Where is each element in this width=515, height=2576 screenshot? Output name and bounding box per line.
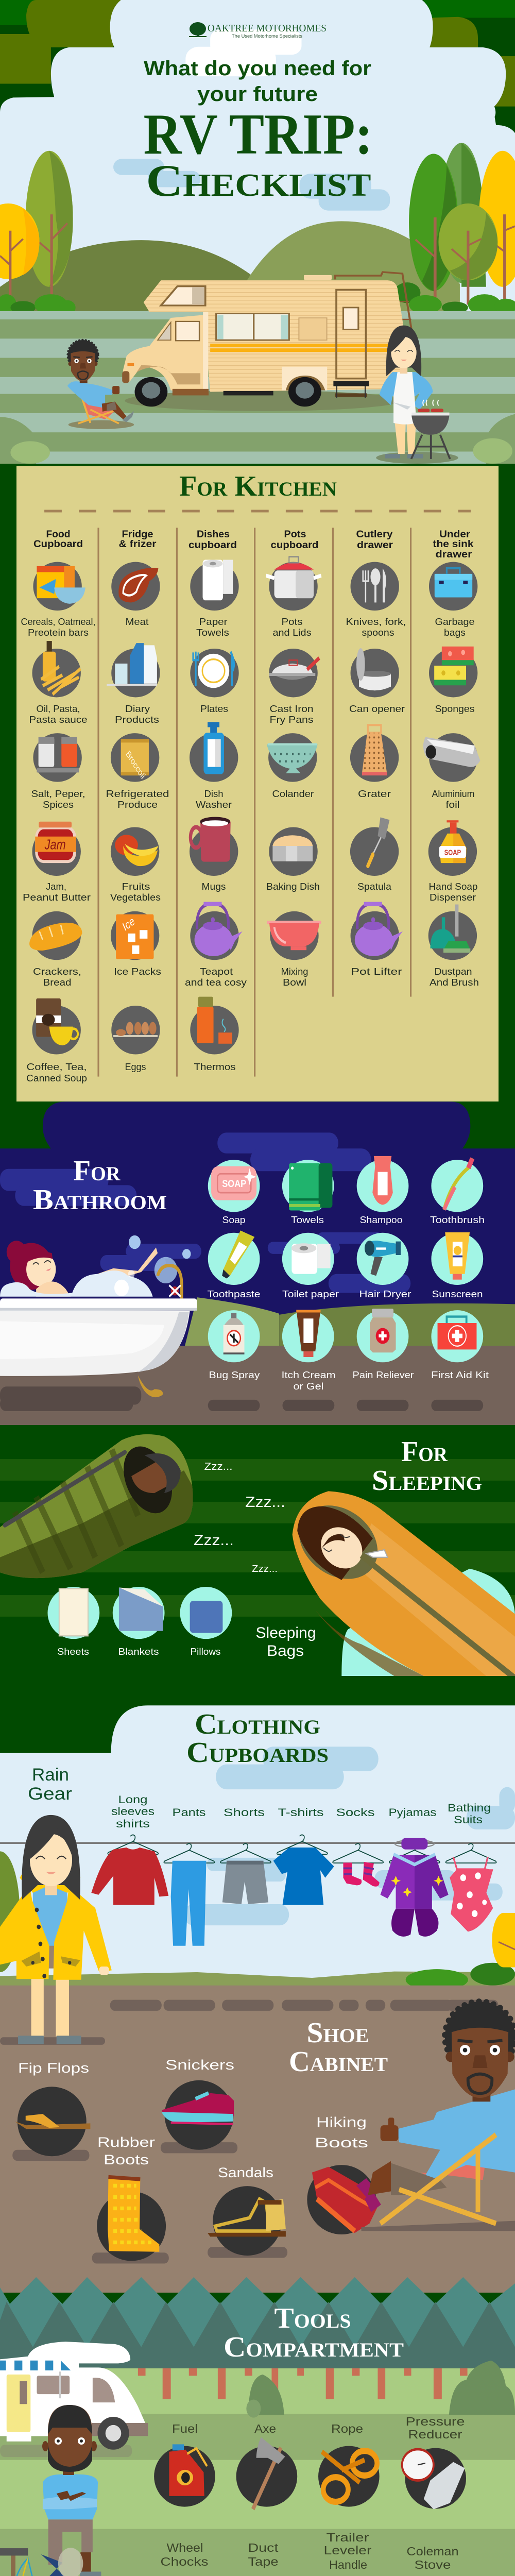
clothing labels: Bathing: [448, 1802, 491, 1814]
hills and bushes: [0, 1851, 515, 1990]
ground: [0, 1986, 515, 2293]
woman in sleeping bag: [288, 1491, 515, 1678]
kitchen item labels: Refrigerated: [106, 789, 169, 799]
column headers: Food: [46, 529, 70, 540]
tool labels: Tape: [248, 2555, 278, 2568]
kitchen item labels: Jam,: [46, 882, 66, 892]
clothing labels: Long: [118, 1794, 147, 1806]
kitchen item labels: Dispenser: [430, 892, 476, 903]
kitchen item labels: Vegetables: [110, 892, 161, 903]
woman with barbecue torso: [376, 372, 458, 464]
column headers: drawer: [357, 540, 393, 551]
icon: plates: [190, 649, 239, 697]
heading: Tools Compartment: Tools: [274, 2302, 351, 2334]
faucet: [158, 1265, 182, 1298]
icon: coffee: [32, 998, 81, 1055]
icon: pillows: [180, 1587, 232, 1639]
panel: clothing: [0, 1705, 515, 2293]
kitchen item labels: spoons: [362, 628, 394, 638]
head: woman rain gear: [22, 1815, 80, 1900]
kitchen item labels: Diary: [125, 704, 150, 714]
column headers: [33, 529, 474, 560]
shoe labels: Hiking: [316, 2114, 367, 2130]
kitchen item labels: Plates: [200, 704, 228, 714]
panel: bathroom: [0, 1101, 515, 1425]
sleeping labels: Pillows: [191, 1647, 220, 1657]
sleeping labels: Sheets: [57, 1647, 89, 1657]
clothing labels: Rain: [32, 1765, 69, 1785]
icon: bug spray: [208, 1310, 260, 1362]
kitchen item labels: Aluminium: [432, 789, 475, 799]
icon: pot lifter: [351, 904, 403, 960]
icon: flip flops: [12, 2087, 90, 2161]
icon: pots and lids: [266, 557, 321, 611]
tool labels: Wheel: [167, 2541, 203, 2554]
icon: jam: [32, 822, 81, 876]
heading: Clothing Cupboards: Clothing: [195, 1708, 320, 1740]
item: pants: [164, 1843, 214, 1946]
wheels: [134, 377, 321, 406]
icon: toothpaste: [208, 1230, 260, 1285]
item: long sleeves shirt: [91, 1835, 168, 1905]
tool labels: Handle: [329, 2558, 367, 2571]
grass: [0, 2368, 515, 2576]
icon: can opener: [351, 648, 399, 697]
kitchen item labels: Baking Dish: [266, 882, 320, 892]
column headers: Pots: [284, 529, 306, 540]
steps: [333, 381, 369, 398]
sleeping labels: Blankets: [118, 1647, 159, 1657]
kitchen item labels: Oil, Pasta,: [36, 704, 80, 714]
icon: soap: SOAP: [222, 1178, 246, 1189]
kitchen item labels: Products: [115, 715, 159, 725]
bathroom labels: Towels: [291, 1215, 324, 1225]
kitchen item labels: Can opener: [349, 704, 405, 714]
icon: blankets: [113, 1587, 165, 1639]
kitchen item labels: Paper: [199, 617, 228, 627]
head: man: [68, 340, 98, 383]
heading: Shoe Cabinet: [289, 2017, 388, 2078]
kitchen item labels: Mugs: [202, 882, 226, 892]
icon: paper towels: [190, 560, 239, 611]
icon: itch cream: [282, 1310, 334, 1362]
logo: OAKTREE MOTORHOMES: [208, 23, 327, 34]
icon: soap: [208, 1160, 260, 1212]
icon: toilet paper: [282, 1233, 334, 1285]
man chair: [67, 381, 134, 429]
icon: jam: Jam: [44, 837, 66, 853]
kitchen item labels: And Brush: [430, 977, 479, 988]
icon: salt and pepper: [33, 733, 82, 782]
kitchen item labels: Grater: [358, 789, 391, 799]
panel: shoe cabinet text: [18, 2017, 388, 2180]
kitchen item labels: [21, 617, 479, 1083]
kitchen dividers: [44, 511, 471, 1077]
item: bathing suit: [446, 1843, 496, 1931]
tool labels: [161, 2415, 465, 2571]
icon: pain reliever: [357, 1309, 408, 1362]
sky cloud: [0, 0, 515, 325]
icon: axe: [236, 2437, 297, 2509]
bathroom labels: Pain Reliever: [352, 1370, 414, 1380]
heading: Tools Compartment: Compartment: [224, 2331, 404, 2363]
title: Checklist: [146, 156, 371, 206]
clouds: [184, 1747, 515, 1925]
panel: sleeping: [0, 1434, 515, 1678]
kitchen item labels: Fry Pans: [270, 715, 313, 725]
kitchen item labels: Bowl: [283, 977, 306, 988]
night clouds: [0, 1132, 410, 1293]
kitchen item labels: Pasta sauce: [29, 715, 88, 725]
item: shorts: [220, 1843, 271, 1904]
title: What do you need for: [144, 57, 371, 80]
tool labels: Stove: [414, 2558, 451, 2571]
stripes: [0, 1459, 515, 1617]
item: pyjamas: [381, 1838, 449, 1937]
icon: fruits: [111, 827, 159, 876]
heading: For Sleeping: For: [401, 1436, 448, 1468]
bathroom labels: Itch Cream: [281, 1370, 336, 1380]
heading: For Sleeping: Sleeping: [372, 1465, 482, 1497]
icon: soap dispenser: SOAP: [444, 848, 461, 857]
icon: oil and pasta: [32, 641, 81, 697]
kitchen item labels: Sponges: [435, 704, 475, 714]
bathroom labels: Toilet paper: [282, 1289, 339, 1299]
heading: For Bathroom: Bathroom: [33, 1184, 167, 1216]
zzz labels: Zzz...: [252, 1564, 278, 1574]
clothing labels: Pants: [172, 1807, 206, 1819]
kitchen item labels: Garbage: [435, 617, 475, 627]
tool labels: Reducer: [408, 2428, 462, 2441]
bathroom labels: Toothbrush: [430, 1215, 485, 1225]
RV ladder and roof: [304, 272, 412, 334]
icon: soap dispenser: [428, 820, 477, 876]
bathroom labels: Bug Spray: [209, 1370, 260, 1380]
trees right: [409, 143, 515, 304]
column headers: Fridge: [122, 529, 153, 540]
heading: For Bathroom: For: [73, 1155, 121, 1187]
clothing labels: [28, 1765, 491, 1830]
kitchen item labels: Teapot: [200, 967, 233, 977]
kitchen item labels: Bread: [43, 977, 71, 988]
kitchen item labels: Dustpan: [435, 967, 472, 977]
kitchen item labels: Meat: [126, 617, 148, 627]
column headers: drawer: [436, 549, 472, 560]
bathroom labels: First Aid Kit: [431, 1370, 489, 1380]
zzz labels: Zzz...: [245, 1494, 285, 1511]
item: socks: [333, 1843, 383, 1887]
kitchen item labels: Coffee, Tea,: [27, 1062, 87, 1072]
icon: sandals: [208, 2186, 287, 2258]
icon: mixing bowl: [267, 911, 321, 960]
icon: mugs: [190, 817, 238, 876]
column headers: Cutlery: [356, 529, 393, 540]
logo: The Used Motorhome Specialists: [232, 33, 302, 39]
kitchen item labels: Cereals, Oatmeal,: [21, 617, 96, 627]
icon: broccoli bag: Broccoli: [124, 749, 147, 781]
teal circle: [341, 1569, 515, 1676]
heading: For Bathroom: [33, 1155, 167, 1216]
icon: first aid kit: [431, 1310, 483, 1362]
ground stripes: [0, 311, 515, 464]
tool labels: Trailer: [327, 2531, 369, 2544]
bathtub: [0, 1298, 197, 1397]
woman in bathtub: [0, 1235, 191, 1297]
sleeping labels: Bags: [267, 1642, 304, 1659]
kitchen item labels: Canned Soup: [26, 1073, 87, 1083]
shoe labels: Rubber: [97, 2134, 155, 2150]
motorhome: [122, 280, 407, 406]
tool labels: Rope: [331, 2422, 363, 2435]
icon: rubber boots: [92, 2177, 169, 2263]
kitchen item labels: Thermos: [194, 1062, 236, 1072]
icon: dish washer bottle: [190, 722, 238, 782]
icon: teapot: [190, 904, 243, 960]
standing man body: [43, 2475, 107, 2576]
tool labels: Duct: [248, 2541, 279, 2554]
clothing labels: sleeves: [111, 1806, 154, 1818]
heading: Shoe Cabinet: Shoe: [307, 2017, 369, 2049]
kitchen item labels: Towels: [196, 628, 229, 638]
icon: thermos: [190, 997, 239, 1055]
kitchen item labels: Pots: [281, 617, 303, 627]
bathroom labels: Hair Dryer: [359, 1289, 411, 1299]
sleeping labels: [57, 1624, 316, 1659]
RV shadow: [125, 391, 401, 411]
icon: ice packs: [111, 911, 159, 960]
zzz labels: [194, 1461, 285, 1574]
fence: [138, 2368, 468, 2399]
kitchen item labels: Spatula: [357, 882, 392, 892]
sleeping labels: Sleeping: [255, 1624, 316, 1641]
rain gear woman: [0, 1859, 112, 2045]
zzz labels: Zzz...: [204, 1461, 233, 1472]
clothing labels: Shorts: [224, 1807, 265, 1819]
clothing labels: Pyjamas: [388, 1807, 437, 1819]
tool labels: Coleman: [407, 2545, 458, 2558]
icon: spatula: [350, 817, 399, 876]
icon: aluminium foil: [423, 733, 480, 782]
shoe labels: Boots: [315, 2135, 368, 2150]
icon: hair dryer: [357, 1233, 408, 1285]
kitchen item labels: Crackers,: [33, 967, 81, 977]
bathroom labels: Toothpaste: [207, 1289, 261, 1299]
kitchen item labels: Ice Packs: [114, 967, 161, 977]
kitchen icons: [29, 557, 480, 1055]
icon: shampoo: [357, 1156, 408, 1212]
icon: eggs: [111, 1006, 160, 1055]
kitchen item labels: Fruits: [122, 882, 150, 892]
title: your future: [197, 83, 318, 106]
kitchen item labels: and Lids: [273, 628, 311, 638]
icon: baking dish: [269, 827, 318, 876]
clothing labels: Gear: [28, 1784, 72, 1804]
head: man standing: [42, 2405, 97, 2475]
man in sleeping bag: [0, 1434, 193, 1578]
barbecue: [411, 400, 450, 459]
bushes: [0, 282, 515, 315]
heading: Shoe Cabinet: Cabinet: [289, 2046, 388, 2078]
heading: For Sleeping: [372, 1436, 482, 1497]
shoe labels: Snickers: [165, 2057, 234, 2073]
mountains: [0, 2277, 515, 2369]
icon: milk: [107, 643, 160, 697]
kitchen item labels: Produce: [117, 800, 158, 810]
kitchen item labels: Pot Lifter: [351, 967, 402, 977]
tool labels: Axe: [254, 2422, 276, 2435]
shoes: [12, 2080, 381, 2263]
tool labels: Leveler: [323, 2544, 372, 2557]
camper van: [0, 2342, 148, 2457]
tool labels: Fuel: [172, 2422, 198, 2435]
icon: pressure reducer: [402, 2448, 466, 2509]
title: [143, 57, 373, 206]
kitchen item labels: Salt, Peper,: [31, 789, 85, 799]
clothing labels: T-shirts: [278, 1807, 323, 1819]
kitchen item labels: Eggs: [125, 1062, 146, 1072]
icon: broccoli bag: [111, 733, 159, 782]
kitchen item labels: foil: [446, 800, 459, 810]
heading: Tools Compartment: [224, 2302, 404, 2363]
kitchen item labels: Washer: [196, 800, 232, 810]
icon: ice packs: Ice: [121, 914, 136, 934]
kitchen item labels: Mixing: [281, 967, 308, 977]
corner bushes: [0, 414, 515, 464]
icon: grater: [350, 725, 399, 782]
icon: sponges: [429, 647, 477, 697]
clouds: [113, 29, 390, 211]
bathroom labels: [207, 1215, 489, 1392]
zzz labels: Zzz...: [194, 1532, 234, 1549]
column headers: Under: [439, 529, 471, 540]
clothing labels: Suits: [454, 1814, 483, 1826]
kitchen item labels: and tea cosy: [185, 977, 247, 988]
tool labels: Chocks: [161, 2555, 208, 2568]
column headers: the sink: [433, 539, 474, 550]
head: woman: [386, 326, 421, 376]
heading: Clothing Cupboards: [186, 1708, 329, 1769]
trees left: [0, 151, 73, 303]
kitchen item labels: Dish: [204, 789, 224, 799]
panel: kitchen: [16, 466, 499, 1101]
column headers: Cupboard: [33, 539, 83, 550]
bushes: [246, 2361, 515, 2418]
clothing labels: shirts: [116, 1818, 150, 1830]
bathroom labels: or Gel: [294, 1381, 323, 1392]
icon: towels: [282, 1160, 334, 1212]
icon: sheets: [47, 1587, 99, 1639]
icon: dustpan and brush: [428, 905, 477, 960]
item: t-shirt: [273, 1835, 334, 1905]
kitchen item labels: Peanut Butter: [23, 892, 91, 903]
clothing labels: Socks: [336, 1807, 375, 1819]
man on chair: [362, 2089, 515, 2231]
toolbox: [0, 2548, 86, 2576]
icon: toothbrush: [431, 1157, 483, 1212]
icon: bread: [29, 911, 82, 960]
circles row 1: [154, 2437, 466, 2509]
kitchen item labels: Colander: [272, 789, 314, 799]
bathroom labels: Soap: [222, 1215, 245, 1225]
hero scene: [0, 0, 515, 464]
head: man large: [445, 2002, 515, 2102]
title: RV TRIP:: [143, 103, 373, 166]
hills: [0, 221, 460, 313]
icon: meat: [111, 562, 160, 611]
heading: Clothing Cupboards: Cupboards: [186, 1737, 329, 1769]
heading: For Kitchen: For Kitchen: [179, 470, 337, 502]
icon: cast iron pan: [269, 649, 319, 697]
bathroom labels: Sunscreen: [432, 1289, 483, 1299]
icon: colander: [267, 733, 318, 782]
kitchen item labels: Spices: [43, 800, 74, 810]
shoe labels: Sandals: [218, 2165, 273, 2180]
logo: [189, 22, 327, 39]
icon: fuel: [154, 2444, 215, 2507]
icon: sneakers: [161, 2080, 237, 2153]
column headers: cupboard: [271, 540, 318, 551]
column headers: Dishes: [197, 529, 230, 540]
shoe labels: [18, 2057, 368, 2180]
shoe labels: Fip Flops: [18, 2060, 89, 2076]
icon: hiking boots: [307, 2165, 381, 2234]
hills and floor: [0, 1297, 515, 1425]
bathroom labels: Shampoo: [359, 1215, 403, 1225]
panel: tools: [0, 2277, 515, 2576]
sky: [0, 1705, 515, 1987]
kitchen item labels: Cast Iron: [270, 704, 313, 714]
kitchen item labels: bags: [444, 628, 466, 638]
icon: rope: [318, 2446, 380, 2507]
icon: toolbox: [429, 562, 477, 611]
clothesline: [0, 1842, 515, 1844]
icon: cereals: [33, 562, 85, 611]
icon: sunscreen: [431, 1232, 483, 1285]
column headers: & frizer: [118, 539, 157, 550]
shadow row: [110, 2000, 499, 2011]
shoe labels: Boots: [104, 2152, 149, 2167]
column headers: cupboard: [188, 540, 237, 551]
icon: cutlery: [351, 562, 399, 611]
tool labels: Pressure: [406, 2415, 465, 2428]
kitchen item labels: Knives, fork,: [346, 617, 406, 627]
kitchen item labels: Preotein bars: [28, 628, 89, 638]
kitchen item labels: Hand Soap: [428, 882, 478, 892]
